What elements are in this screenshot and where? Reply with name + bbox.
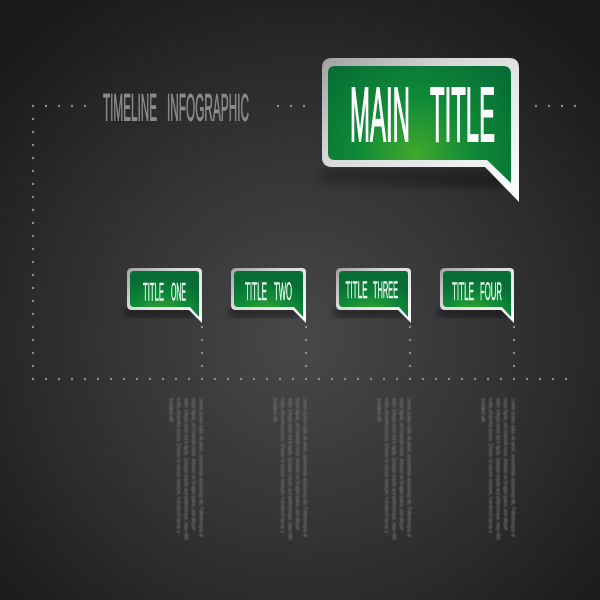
body text column two: tincidunt elit. xyxy=(272,398,278,423)
label: TITLE xyxy=(245,278,267,306)
body text column four: Lorem ipsum dolor sit amet, consectetur adipiscing elit. Pellentesque id xyxy=(510,398,516,537)
body text column one xyxy=(168,398,204,540)
body text column three: dolor. Integer porta dui in ligula. Quisque mauris sed pellentesque, vitae nibh xyxy=(390,398,396,540)
body text column four: nulla pharetra purus. Donec id ipsum semper, hendrerit lacus a xyxy=(487,398,493,533)
body text column two xyxy=(272,398,308,540)
bubble: title four xyxy=(438,268,514,323)
bubble: title two: TWO xyxy=(274,278,292,306)
heading: timeline infographic: TIMELINE xyxy=(103,88,157,130)
body text column three: Lorem ipsum dolor sit amet, consectetur adipiscing elit. Pellentesque id xyxy=(406,398,412,537)
label: TITLE xyxy=(346,277,368,304)
label xyxy=(245,278,292,306)
main title text: MAIN xyxy=(350,72,410,158)
body text column four: tincidunt elit. xyxy=(480,398,486,423)
bubble: title one: ONE xyxy=(171,278,186,306)
body text column one: dolor. Integer porta dui in ligula. Quisque mauris sed pellentesque, vitae nibh xyxy=(182,398,188,540)
body text column three: nulla pharetra purus. Donec id ipsum semper, hendrerit lacus a xyxy=(383,398,389,533)
text: THREE xyxy=(373,277,398,304)
bubble: title three xyxy=(334,268,411,323)
text: INFOGRAPHIC xyxy=(167,88,249,130)
body text column four: turpis ligula, vel molestie nunc. Aenean eu feugiat quam, sed aliquet xyxy=(502,398,508,531)
body text column two: dolor. Integer porta dui in ligula. Quisque mauris sed pellentesque, vitae nibh xyxy=(286,398,292,540)
dotted timeline frame xyxy=(33,106,576,380)
body text column three: turpis ligula, vel molestie nunc. Aenean eu feugiat quam, sed aliquet xyxy=(398,398,404,531)
body text column three: tincidunt elit. xyxy=(376,398,382,423)
label: TITLE xyxy=(143,278,164,306)
body text column one: nulla pharetra purus. Donec id ipsum semper, hendrerit lacus a xyxy=(175,398,181,533)
body text column two: turpis ligula, vel molestie nunc. Aenean eu feugiat quam, sed aliquet xyxy=(294,398,300,531)
main title bubble xyxy=(320,58,519,202)
body text column one: turpis ligula, vel molestie nunc. Aenean eu feugiat quam, sed aliquet xyxy=(190,398,196,531)
text: FOUR xyxy=(480,278,502,306)
body text column four xyxy=(480,398,516,540)
body text column one: Lorem ipsum dolor sit amet, consectetur adipiscing elit. Pellentesque id xyxy=(198,398,204,537)
label xyxy=(143,278,186,306)
body text column four: dolor. Integer porta dui in ligula. Quisque mauris sed pellentesque, vitae nibh xyxy=(494,398,500,540)
body text column three xyxy=(376,398,412,540)
bubble: title one xyxy=(125,268,202,323)
body text column one: tincidunt elit. xyxy=(168,398,174,423)
bubble: title two xyxy=(229,268,306,323)
body text column two: Lorem ipsum dolor sit amet, consectetur adipiscing elit. Pellentesque id xyxy=(302,398,308,537)
label: TITLE xyxy=(452,278,474,306)
body text column two: nulla pharetra purus. Donec id ipsum semper, hendrerit lacus a xyxy=(279,398,285,533)
